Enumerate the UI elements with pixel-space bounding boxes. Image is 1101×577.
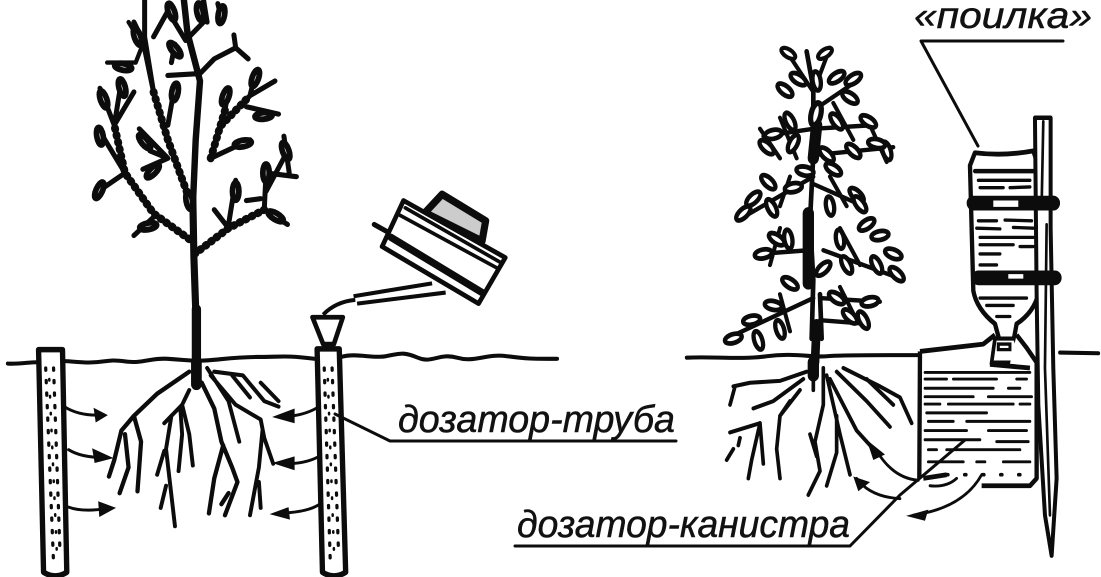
label: poilka [914,0,1092,146]
label: dozator-kanistra: дозатор-канистра [517,504,850,546]
watering can [323,194,505,315]
tree [93,0,296,362]
tomato plant [724,46,906,362]
right tube with funnel [312,317,346,576]
bottle [970,151,1053,362]
left tube [39,350,67,576]
ground line right [687,353,1098,358]
ground line left [8,354,557,364]
stake [1035,118,1057,556]
label: dozator-truba: дозатор-труба [398,399,675,441]
label: dozator-kanistra [515,440,965,546]
left scene [8,0,557,576]
roots [109,362,279,526]
canister [919,335,1037,486]
left arrows [64,407,116,517]
right arrows [270,408,319,520]
canister arrows [853,440,982,521]
tomato roots [727,362,912,495]
right scene [687,46,1098,556]
